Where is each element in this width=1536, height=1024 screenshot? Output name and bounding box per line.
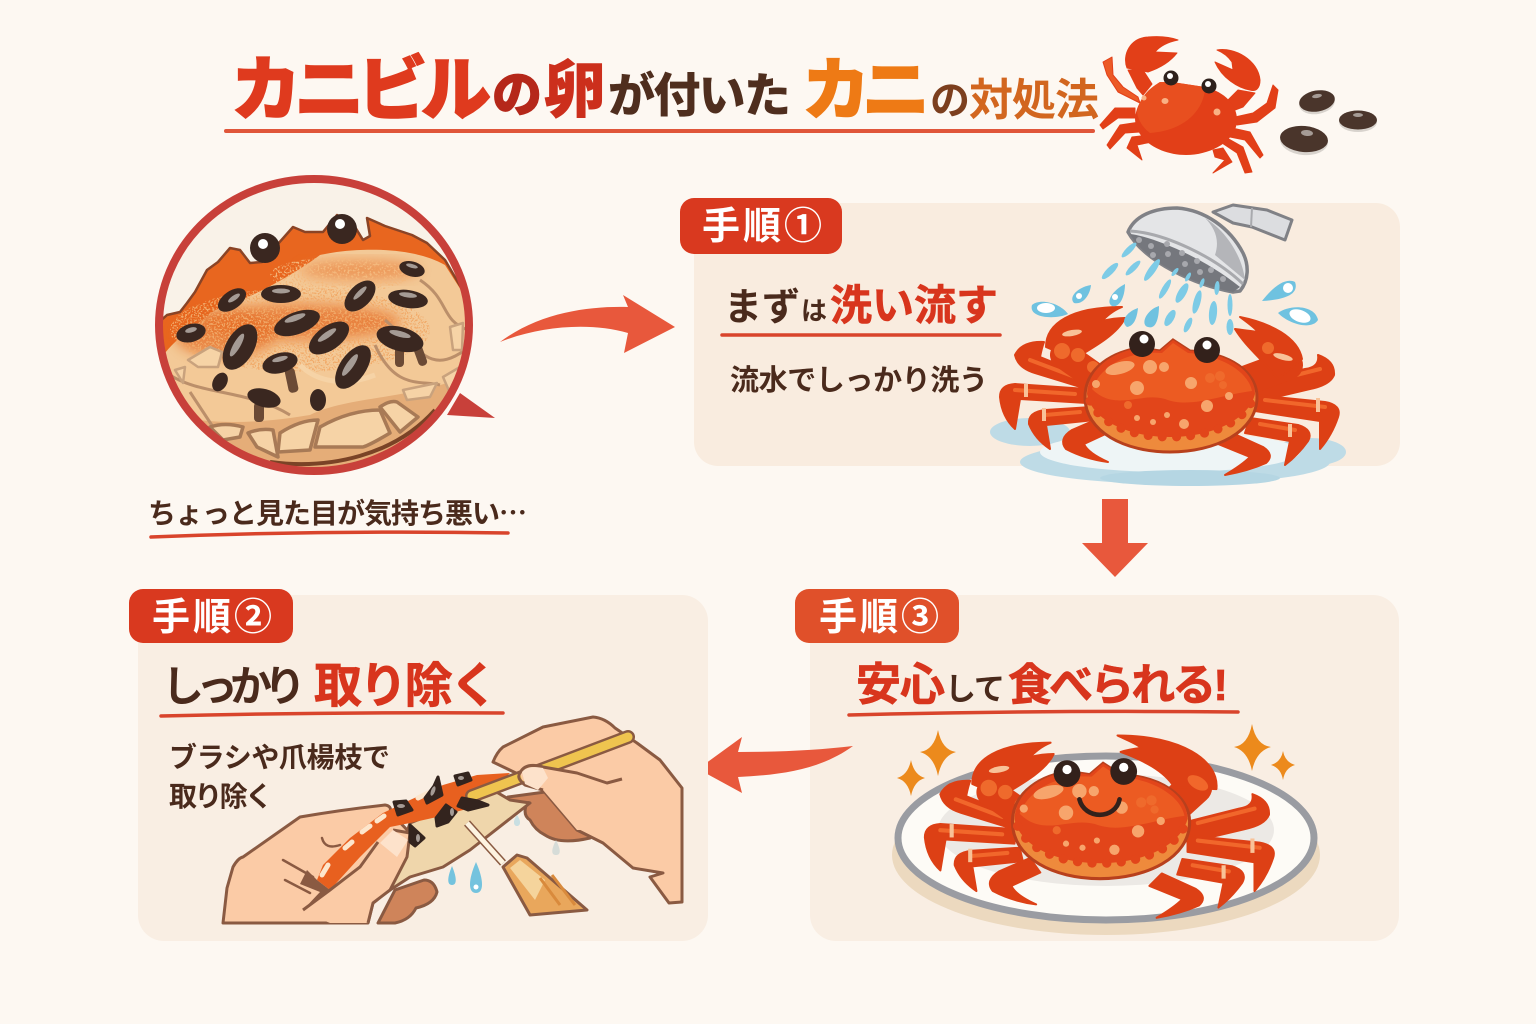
heading: step 1 [722,282,1000,335]
heading: step 3 [849,659,1238,715]
text: step 2 [169,741,390,812]
title: の [930,79,970,123]
illustration: hands removing eggs [223,717,682,923]
left lower fingers [378,880,437,923]
badge: step 1: 手順① [702,206,822,248]
text: step 2: ブラシや爪楊枝で [169,741,390,773]
speech bubble [150,179,495,480]
illustration: puddle [990,418,1346,486]
title: の [492,67,542,123]
crab leg [317,773,510,890]
title: カニ [802,53,930,129]
right hand [493,717,682,903]
panel: close-up of eggs on shell [148,179,527,537]
heading: step 1: まず [724,287,800,329]
badge: step 2 [129,589,293,643]
icon: sparkles [897,724,1295,796]
crab leg underside [387,790,530,892]
right hand fingers [505,790,600,841]
title [226,51,1099,131]
badge: step 2: 手順② [152,597,272,639]
icon: leech eggs near title [1279,88,1377,157]
icon: shower head [1128,205,1292,292]
panel: step 3 [795,589,1399,941]
badge: step 1 [680,198,842,254]
badge: step 3 [795,589,959,643]
text: step 1: 流水でしっかり洗う [730,364,988,397]
thumb of right hand [519,765,622,830]
heading: step 3: 安心 [856,659,945,710]
panel: step 1 [680,198,1400,486]
badge: step 3: 手順③ [819,597,939,639]
water drops [448,815,560,893]
toothpick [467,823,587,915]
arrow: to step 2 [698,737,853,793]
text: step 2: 取り除く [169,781,273,812]
icon: water drops [1032,241,1318,335]
leech eggs [174,214,429,422]
icon: title crab [1100,37,1278,173]
heading: step 2: しっかり [162,663,306,710]
title: カニビル [231,51,491,129]
heading: step 2: 取り除く [314,660,498,713]
left hand [223,805,410,923]
brush [472,737,628,796]
arrow: to step 3 [1082,499,1148,577]
heading: step 3: 食べられる! [1008,661,1228,710]
heading: step 1: は [801,296,827,326]
arrow: to step 1 [500,295,675,353]
title: 卵 [543,56,606,126]
illustration: happy crab [925,735,1274,918]
leech eggs on leg [394,773,488,846]
panel: step 2 [129,589,708,941]
illustration: plate [892,756,1320,935]
heading: step 2 [161,660,503,716]
caption: ちょっと見た目が気持ち悪い… [148,492,527,532]
heading: step 3: して [945,672,1005,707]
thumb of left hand [303,830,410,923]
illustration: crab under shower [1000,307,1339,475]
title: が付いた [608,69,791,122]
heading: step 1: 洗い流す [830,282,998,329]
title: 対処法 [969,76,1099,125]
